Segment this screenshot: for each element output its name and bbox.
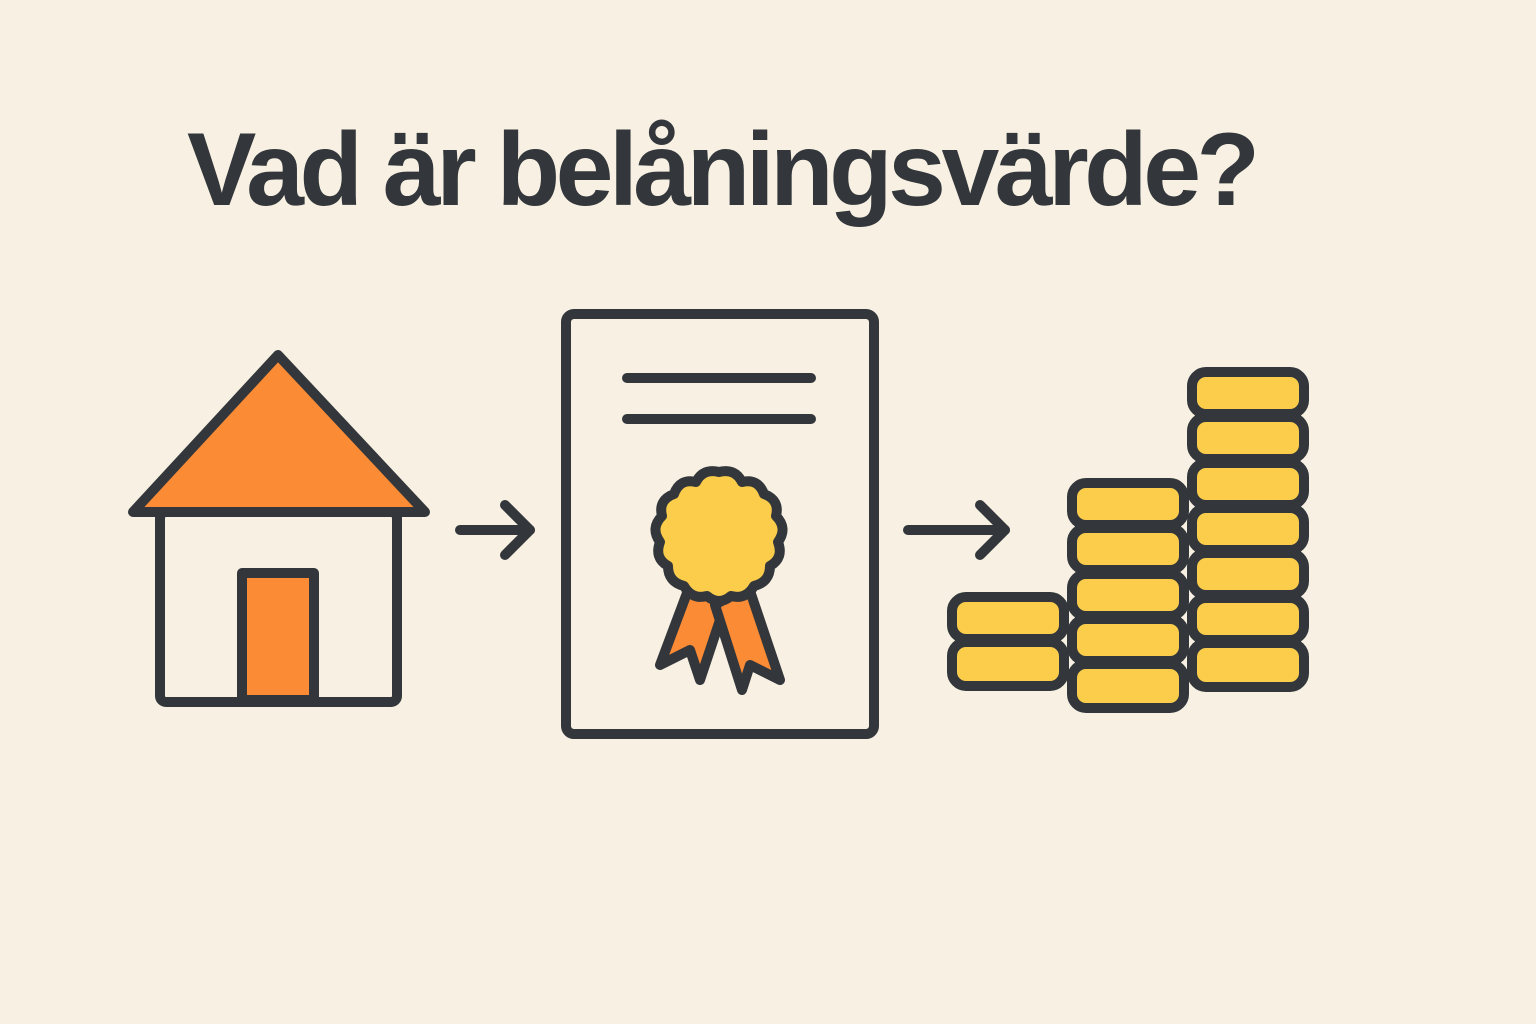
rosette <box>655 471 783 601</box>
title: Vad är belåningsvärde? <box>187 112 1256 228</box>
ribbons <box>660 585 780 690</box>
arrow: document to coins <box>908 505 1005 555</box>
icon: document with rosette <box>566 314 874 734</box>
icon: coin stacks <box>952 372 1304 708</box>
icon: house <box>133 355 425 702</box>
arrow: house to document <box>460 505 530 555</box>
